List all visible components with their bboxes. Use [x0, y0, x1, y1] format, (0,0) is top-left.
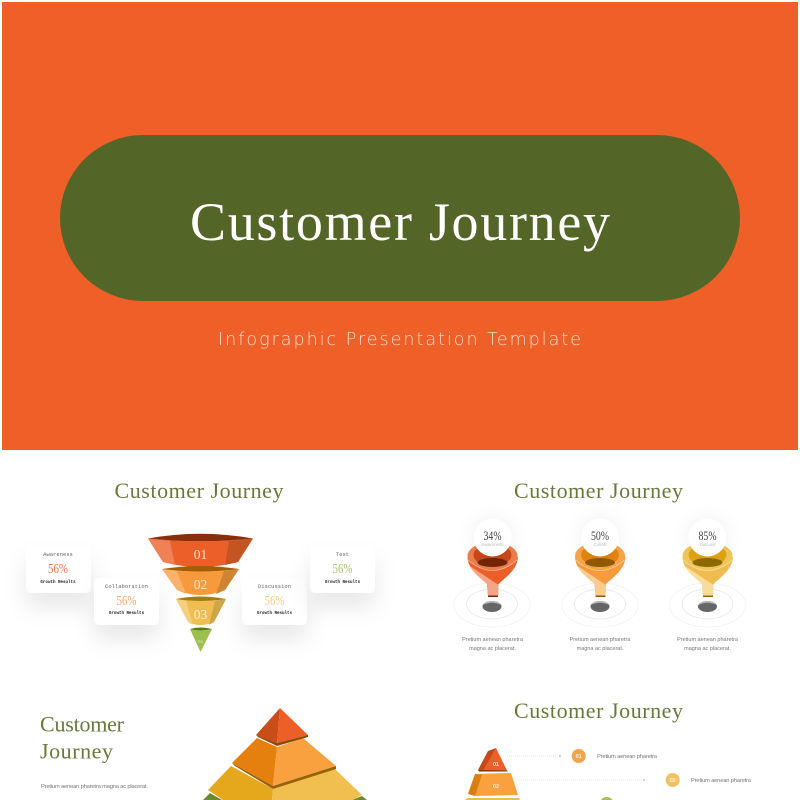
- funnel: 34% awareness: Pretium aenean pharetra: [462, 637, 524, 643]
- subtitle: Infographic Presentation Template: [218, 330, 581, 350]
- pyramid tier 03: [465, 798, 520, 800]
- heading: Customer Journey: [514, 698, 683, 723]
- pyramid tier 02: [468, 773, 518, 796]
- funnel: 34% awareness: [454, 518, 530, 652]
- funnel: 34% awareness: Awareness: [481, 542, 504, 547]
- tier 01: 01: [194, 547, 207, 562]
- panel: funnel slide: [26, 478, 375, 652]
- funnel: 85% discuss: Pretium aenean pharetra: [677, 637, 739, 643]
- body text: Pretium aenean pharetra magna ac placerat.: [41, 784, 148, 790]
- step 02: [666, 773, 752, 787]
- tier 04: 04: [198, 639, 204, 644]
- card: collaboration: [94, 578, 159, 625]
- funnel: 50% collab: magna ac placerat.: [577, 646, 624, 652]
- card: collaboration: Collaboration: [105, 583, 148, 590]
- funnel: 50% collab: [562, 518, 638, 652]
- card: test: Growth Results: [325, 580, 361, 585]
- heading: Customer: [40, 712, 125, 736]
- card: discussion: Discussion: [258, 583, 291, 590]
- funnel: 85% discuss: 85%: [698, 528, 717, 543]
- step 01: 01: [576, 754, 582, 760]
- tier 02: 02: [194, 577, 207, 592]
- funnel chart: [148, 534, 253, 652]
- card: awareness: 56%: [48, 562, 68, 577]
- card: collaboration: Growth Results: [109, 611, 145, 616]
- step 01: Pretium aenean pharetra: [597, 754, 658, 760]
- tier 03: 03: [194, 607, 208, 622]
- funnel: 34% awareness: 34%: [484, 528, 502, 543]
- funnel: 34% awareness: magna ac placerat.: [469, 646, 516, 652]
- card: test: Test: [336, 551, 349, 558]
- funnel: 50% collab: Collab: [594, 542, 607, 547]
- pyramid tier 01: 01: [493, 762, 499, 768]
- base green layer: [203, 793, 367, 800]
- card: awareness: Growth Results: [40, 580, 76, 585]
- step 01: [572, 749, 658, 763]
- connector 01: [507, 755, 561, 757]
- funnel: 85% discuss: [670, 518, 746, 652]
- heading: Customer Journey: [514, 478, 683, 503]
- card: test: 56%: [332, 562, 353, 577]
- heading: Customer Journey: [114, 478, 284, 503]
- card: awareness: [26, 546, 91, 593]
- title pill: [60, 135, 740, 301]
- funnel: 50% collab: Pretium aenean pharetra: [570, 637, 631, 643]
- panel: three funnels slide: [454, 478, 746, 652]
- step 03 badge: [600, 797, 614, 800]
- pyramid tier 01: [478, 748, 508, 772]
- panel: cover slide: [2, 2, 798, 450]
- layer: red: [256, 708, 308, 746]
- heading: [40, 712, 125, 764]
- title pill: Customer Journey: [190, 192, 610, 252]
- step 02: 02: [670, 778, 676, 784]
- panel: stacked pyramid slide: [465, 698, 752, 800]
- card: discussion: [242, 578, 307, 625]
- panel: pyramid slide: [40, 708, 367, 800]
- funnel: 85% discuss: magna ac placerat.: [684, 646, 731, 652]
- card: test: [310, 546, 375, 593]
- card: discussion: 56%: [264, 594, 285, 609]
- connector 02: [519, 779, 645, 781]
- card: discussion: Growth Results: [257, 611, 293, 616]
- layer: yellow: [208, 766, 362, 800]
- step 02: Pretium aenean pharetra: [691, 778, 752, 784]
- pyramid tier 02: 02: [493, 784, 499, 790]
- funnel: 50% collab: 50%: [591, 528, 609, 543]
- heading: Journey: [40, 738, 113, 764]
- layer: orange: [232, 738, 336, 789]
- card: awareness: Awareness: [43, 551, 73, 558]
- card: collaboration: 56%: [116, 594, 137, 609]
- pyramid chart: [203, 708, 367, 800]
- funnel: 85% discuss: Discuss: [700, 542, 716, 547]
